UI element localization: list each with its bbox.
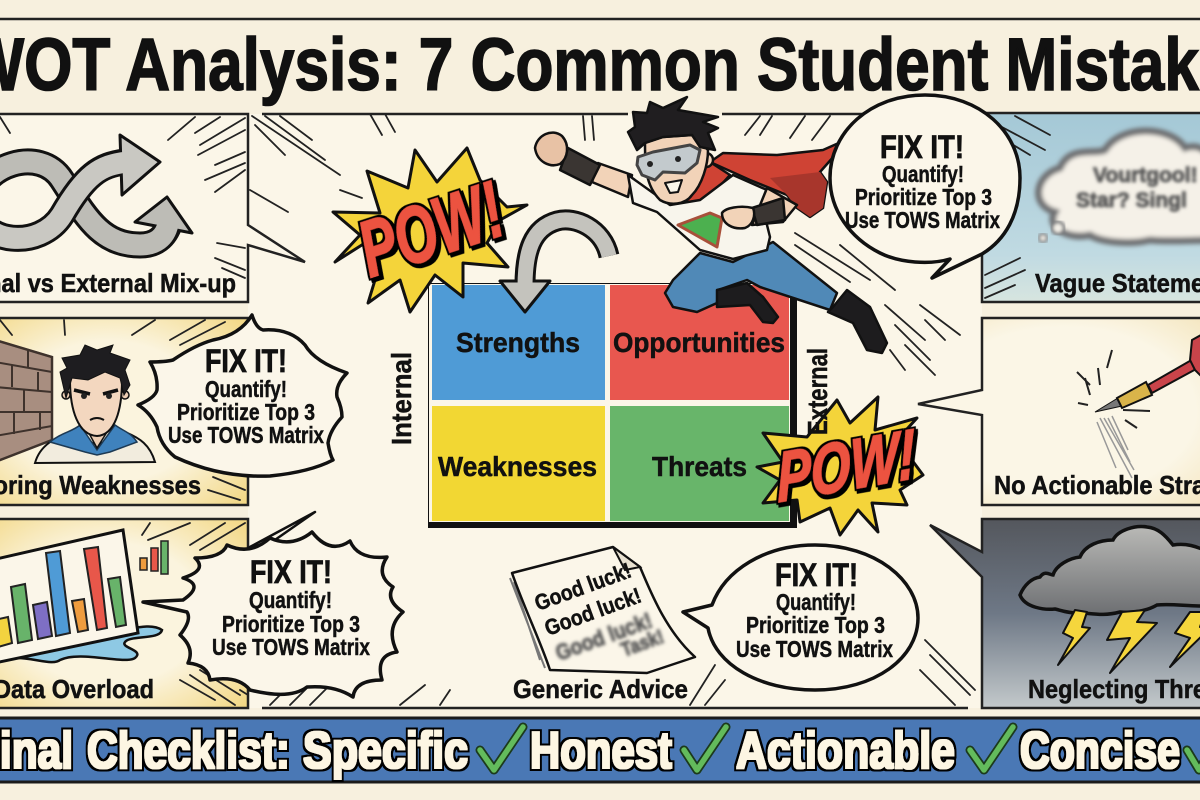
banner: final checklist — [0, 718, 1200, 782]
callout: fix it bubble 4: Use TOWS Matrix — [736, 636, 893, 662]
callout: fix it bubble 3: Use TOWS Matrix — [212, 634, 370, 660]
icon: blurry thought cloud — [1039, 131, 1200, 242]
face — [645, 135, 708, 204]
icon: generic note paper: Good luck! — [541, 583, 645, 641]
callout: POW top: POW! — [348, 164, 514, 294]
icon: spilled puddle — [0, 627, 162, 662]
callout: fix it bubble 4: Prioritize Top 3 — [746, 612, 885, 638]
callout: fix it bubble 1: FIX IT! — [880, 129, 964, 165]
callout: fix it bubble 2: Quantify! — [205, 376, 287, 402]
icon: blurry thought cloud: Star? Singl — [1076, 189, 1187, 212]
chart: SWOT matrix — [386, 283, 797, 528]
front boot — [828, 290, 887, 353]
callout: fix it bubble 3: Prioritize Top 3 — [222, 611, 360, 637]
quadrant: weaknesses: Weaknesses — [438, 451, 597, 482]
quadrant: opportunities — [610, 285, 789, 400]
icon: crossing arrows — [0, 135, 192, 245]
callout: fix it bubble 1: Prioritize Top 3 — [855, 184, 992, 210]
rear boot — [717, 283, 778, 323]
panel: central frame — [248, 114, 982, 708]
callout: fix it bubble 3: Quantify! — [249, 587, 332, 613]
shirt emblem — [678, 213, 722, 247]
icon: generic note paper: Good luck! — [552, 608, 656, 666]
icon: check marks — [480, 727, 1200, 770]
axis label: external: External — [802, 348, 833, 435]
icon: generic note paper: Good luck! — [531, 558, 635, 616]
icon: lightning bolts — [1058, 610, 1200, 673]
callout: fix it bubble 2: Use TOWS Matrix — [168, 422, 324, 448]
banner: final checklist: Honest — [530, 722, 672, 780]
banner: final checklist: Specific — [303, 722, 468, 780]
callout: fix it bubble 2 — [138, 315, 347, 476]
callout: fix it bubble 3 — [143, 512, 403, 697]
fist — [535, 133, 567, 165]
panel: ignoring weaknesses — [0, 318, 248, 505]
icon: blurry thought cloud: Vourtgool! — [1093, 164, 1198, 187]
shirt — [628, 175, 770, 259]
panel: internal vs external mix-up — [0, 114, 305, 302]
icon: generic note paper — [510, 547, 695, 673]
axis label: internal: Internal — [386, 352, 417, 445]
cape — [710, 138, 850, 217]
callout: POW top — [333, 148, 527, 312]
banner: final checklist: Checklist: — [87, 722, 290, 780]
quadrant: weaknesses — [432, 406, 605, 521]
panel: vague statements — [982, 113, 1200, 302]
callout: POW bottom: POW! — [776, 413, 916, 517]
icon: frowning student — [35, 345, 155, 463]
goggles — [637, 145, 700, 180]
callout: fix it bubble 4: Quantify! — [776, 589, 856, 615]
quadrant: strengths: Strengths — [456, 327, 580, 358]
callout: fix it bubble 1: Quantify! — [882, 161, 964, 187]
jeans — [665, 242, 837, 312]
callout: fix it bubble 3: FIX IT! — [250, 554, 332, 590]
quadrant: strengths — [432, 285, 605, 400]
callout: fix it bubble 4 — [683, 545, 918, 690]
icon: small bars — [140, 541, 168, 574]
mouth — [665, 180, 682, 193]
icon: brick wall — [0, 340, 52, 462]
icon: storm cloud — [1020, 527, 1200, 614]
quadrant: opportunities: Opportunities — [613, 327, 785, 358]
panel: data overload — [0, 519, 248, 708]
ear — [699, 153, 713, 167]
callout: POW bottom — [757, 348, 923, 535]
icon: missed dart — [1077, 330, 1200, 478]
panel: neglecting threats — [930, 519, 1200, 708]
hair — [628, 97, 718, 150]
callout: fix it bubble 1: Use TOWS Matrix — [845, 207, 1000, 233]
quadrant: threats: Threats — [652, 451, 747, 482]
eyes — [647, 156, 681, 167]
extended arm — [592, 163, 632, 197]
arrow: curved grey loop — [500, 220, 609, 312]
panel: generic advice — [510, 547, 695, 704]
banner: final checklist: Actionable — [736, 722, 955, 780]
quadrant: threats — [610, 406, 789, 521]
callout: fix it bubble 2: Prioritize Top 3 — [177, 399, 315, 425]
right arm — [752, 188, 797, 225]
callout: fix it bubble 1 — [830, 95, 1020, 278]
chart: tilted bar chart — [0, 530, 138, 665]
icon: generic note paper: Task! — [618, 626, 667, 662]
icon: flying superhero student — [535, 97, 887, 353]
callout: fix it bubble 4: FIX IT! — [775, 557, 858, 593]
callout: fix it bubble 2: FIX IT! — [205, 343, 287, 379]
label: generic advice: Generic Advice — [513, 674, 688, 704]
panel: no actionable strategy — [918, 318, 1200, 505]
